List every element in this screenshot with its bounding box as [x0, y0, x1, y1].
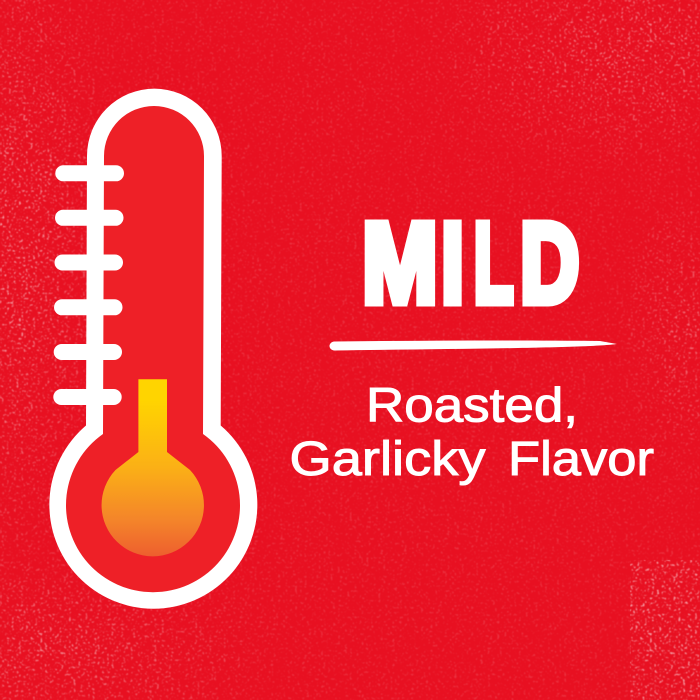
scale tick marks	[61, 173, 116, 397]
thermometer white outline	[49, 89, 257, 609]
thermometer red interior	[66, 106, 240, 592]
heading: MILD: M	[362, 199, 438, 326]
text: flavor description	[290, 380, 654, 486]
heading: MILD: I	[441, 200, 464, 326]
heading: MILD: D	[520, 200, 579, 326]
gradient liquid	[102, 379, 204, 556]
text: flavor description: Garlicky	[290, 433, 486, 486]
heading: MILD	[362, 199, 579, 327]
text: flavor description: Flavor	[508, 433, 654, 486]
text: flavor description: Roasted,	[366, 380, 578, 433]
icon: thermometer	[49, 89, 257, 609]
divider line	[330, 340, 617, 350]
heading: MILD: L	[474, 200, 513, 327]
